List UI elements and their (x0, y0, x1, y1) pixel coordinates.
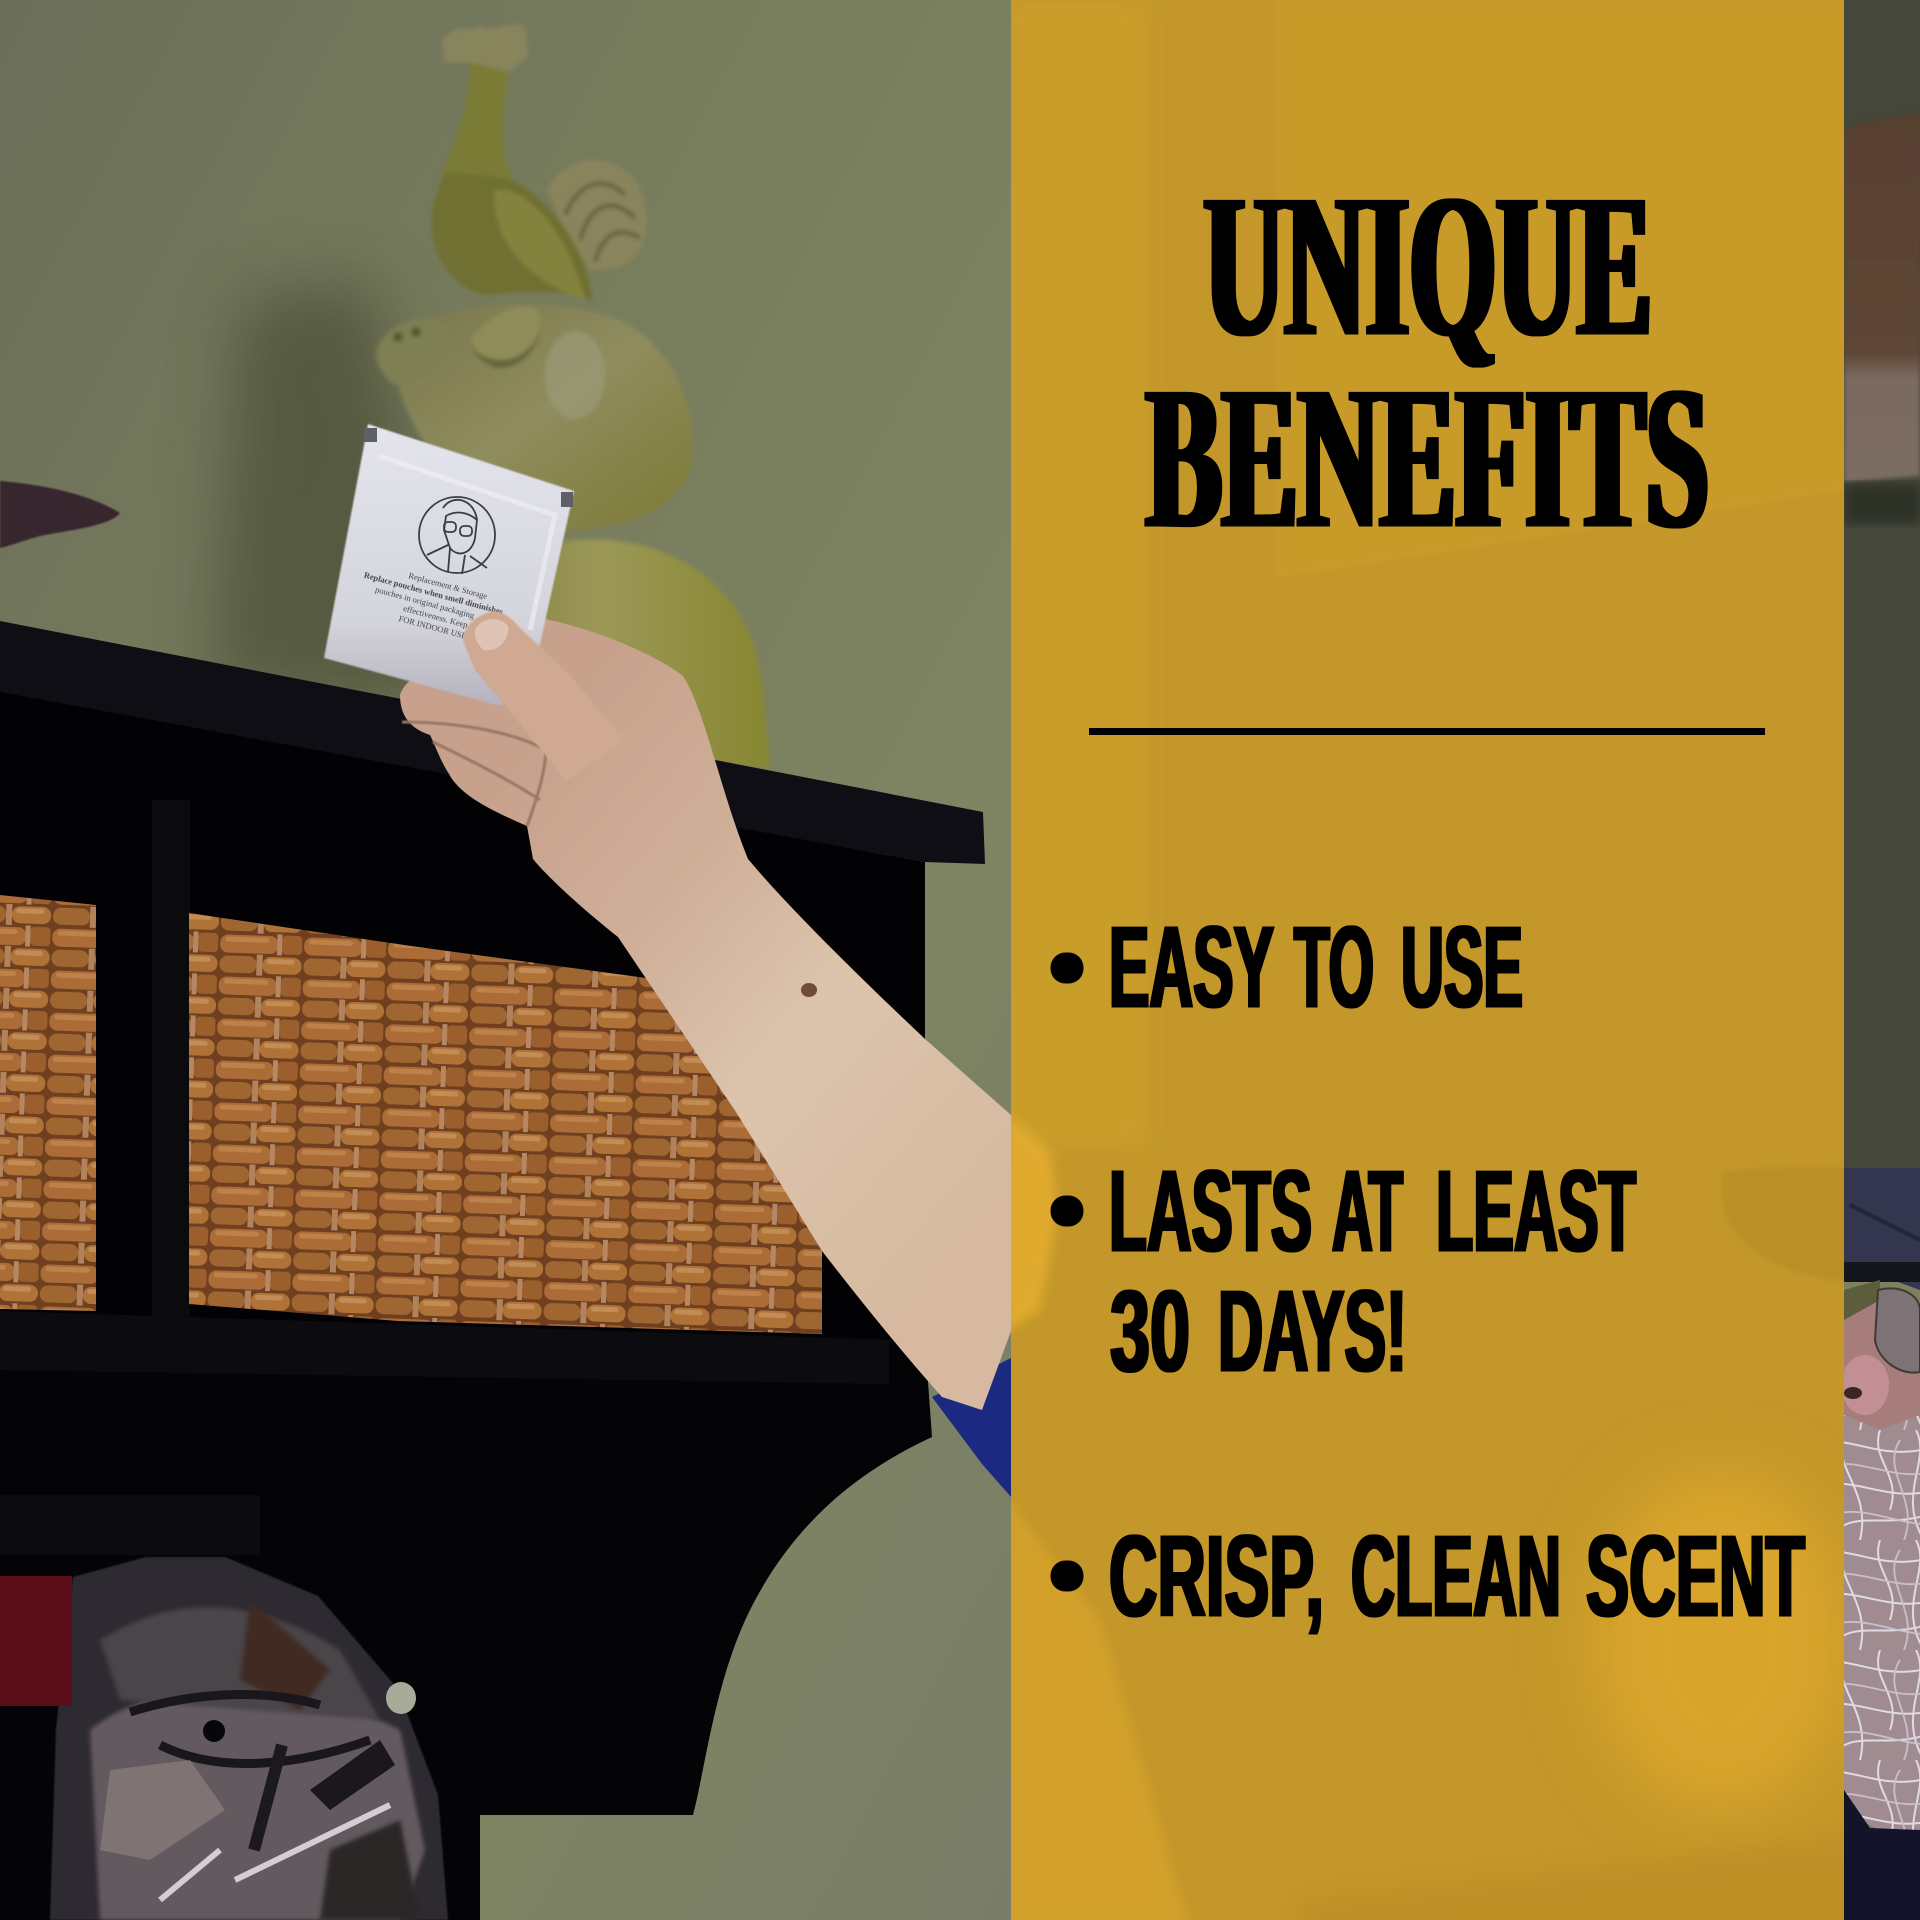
pouch text: FOR INDOOR USE (398, 613, 468, 641)
glasses lens (1875, 1288, 1920, 1373)
ghost wall bright upper right (1276, 0, 1860, 578)
pouch text: pouches in original packaging (374, 584, 476, 620)
benefit: easy to use (1052, 902, 1523, 1032)
nose and cheek (1844, 1302, 1920, 1430)
benefit: lasts at least 30 days: LASTS (1109, 1146, 1312, 1276)
benefit: crisp, clean scent (1052, 1511, 1805, 1641)
benefit: lasts at least 30 days: DAYS! (1218, 1266, 1407, 1396)
shelf top ledge (0, 621, 985, 864)
pig body (377, 304, 692, 530)
lower shelf and bracket (0, 1311, 932, 1920)
benefit: lasts at least 30 days: AT (1332, 1146, 1403, 1276)
heading divider rule (1089, 728, 1765, 735)
finger creases (402, 722, 546, 826)
ghost light band left (1000, 0, 1150, 1150)
rooster tail (547, 160, 647, 270)
benefit: lasts at least 30 days: 30 (1110, 1266, 1190, 1396)
benefit: crisp, clean scent: CRISP, (1109, 1511, 1324, 1641)
ghost lower-left wall (1011, 1506, 1186, 1920)
benefit: crisp, clean scent: CLEAN (1351, 1511, 1561, 1641)
wicker basket left (0, 895, 96, 1311)
dark shirt (1844, 1790, 1920, 1920)
camouflage cap (50, 1557, 448, 1920)
sleeve (932, 1358, 1011, 1497)
beard (1844, 1415, 1920, 1830)
cabinet body (0, 692, 925, 1345)
rooster body (432, 170, 592, 300)
benefit: easy to use: TO (1294, 902, 1374, 1032)
pouch text: Replace pouches when smell diminishes (363, 570, 505, 617)
benefit: lasts at least 30 days (1052, 1146, 1636, 1396)
right photo strip: man's face peeking out (1841, 0, 1920, 1920)
benefit: easy to use: EASY (1109, 902, 1274, 1032)
hook rail (0, 1495, 260, 1555)
benefit: lasts at least 30 days: LEAST (1436, 1146, 1636, 1276)
panel: benefits background (1000, 0, 1860, 1920)
benefit: easy to use: USE (1401, 902, 1523, 1032)
pig snout (376, 319, 450, 385)
red fabric behind cap (0, 1576, 72, 1706)
hand and forearm (400, 618, 1011, 1410)
cap (1844, 1168, 1920, 1290)
wall shadow behind shelf items (210, 280, 450, 720)
pouch text: effectiveness. Keep (402, 603, 469, 630)
ghost shirt at bottom (1300, 1835, 1860, 1920)
pouch text: Replacement & Storage (407, 570, 489, 601)
thumb over pouch (463, 611, 625, 781)
dark wall (1844, 0, 1920, 1200)
figurine base (430, 539, 770, 768)
cabinet dividers (152, 800, 190, 1320)
photo background: olive wall (0, 0, 1011, 1920)
black wall shelf cabinet (0, 621, 985, 1920)
wicker basket centre (189, 913, 822, 1334)
rooster neck and comb (442, 60, 512, 178)
pouch logo (419, 497, 495, 574)
freckle (801, 983, 817, 997)
pouch text (354, 559, 508, 649)
pig ear (472, 308, 540, 368)
ceramic rooster and pig figurine (376, 25, 770, 768)
ghost man's cap (1724, 1170, 1844, 1279)
ghost man's beard (1590, 1470, 1850, 1810)
brimmed hat on shelf (0, 481, 120, 548)
heading: unique benefits (1146, 153, 1709, 571)
thumbnail (475, 619, 508, 650)
forearm and hand holding pouch (400, 618, 1011, 1497)
wooden beam (1844, 112, 1920, 482)
product pouch (324, 424, 574, 706)
ghost forearm (1011, 1116, 1059, 1331)
